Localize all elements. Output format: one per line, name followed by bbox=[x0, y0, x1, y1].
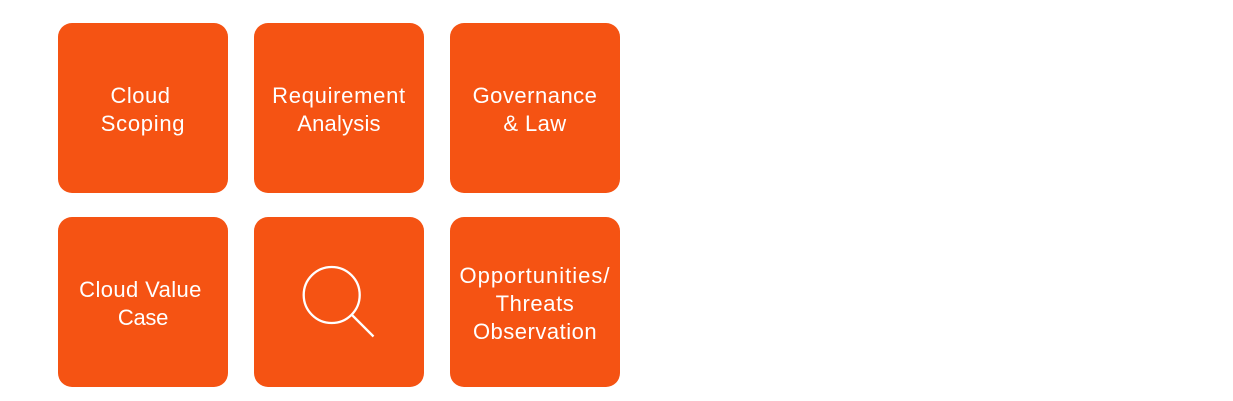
icon: magnifying glass bbox=[302, 266, 374, 338]
tile: Cloud Value Case: Cloud Value bbox=[79, 277, 202, 302]
tile: Opportunities/Threats Observation: Threats bbox=[496, 291, 574, 316]
tile: Governance & Law: & Law bbox=[503, 111, 567, 136]
tile: Cloud Scoping: Scoping bbox=[101, 111, 185, 136]
tile: Requirement Analysis bbox=[254, 23, 424, 193]
tile: Governance & Law bbox=[450, 23, 620, 193]
tile: Cloud Value Case bbox=[58, 217, 228, 387]
tile: Opportunities/Threats Observation: Observation bbox=[473, 319, 597, 344]
tile: Governance & Law: Governance bbox=[473, 83, 597, 108]
tile: Cloud Scoping: Cloud bbox=[110, 83, 170, 108]
tile: Cloud Value Case: Case bbox=[118, 305, 168, 330]
tile: Opportunities/Threats Observation bbox=[450, 217, 620, 387]
tile: Requirement Analysis: Analysis bbox=[297, 111, 381, 136]
tile: Opportunities/Threats Observation: Opportunities/ bbox=[460, 263, 610, 288]
tile: Requirement Analysis: Requirement bbox=[272, 83, 406, 108]
tile: magnifying glass bbox=[254, 217, 424, 387]
tile: Cloud Scoping bbox=[58, 23, 228, 193]
